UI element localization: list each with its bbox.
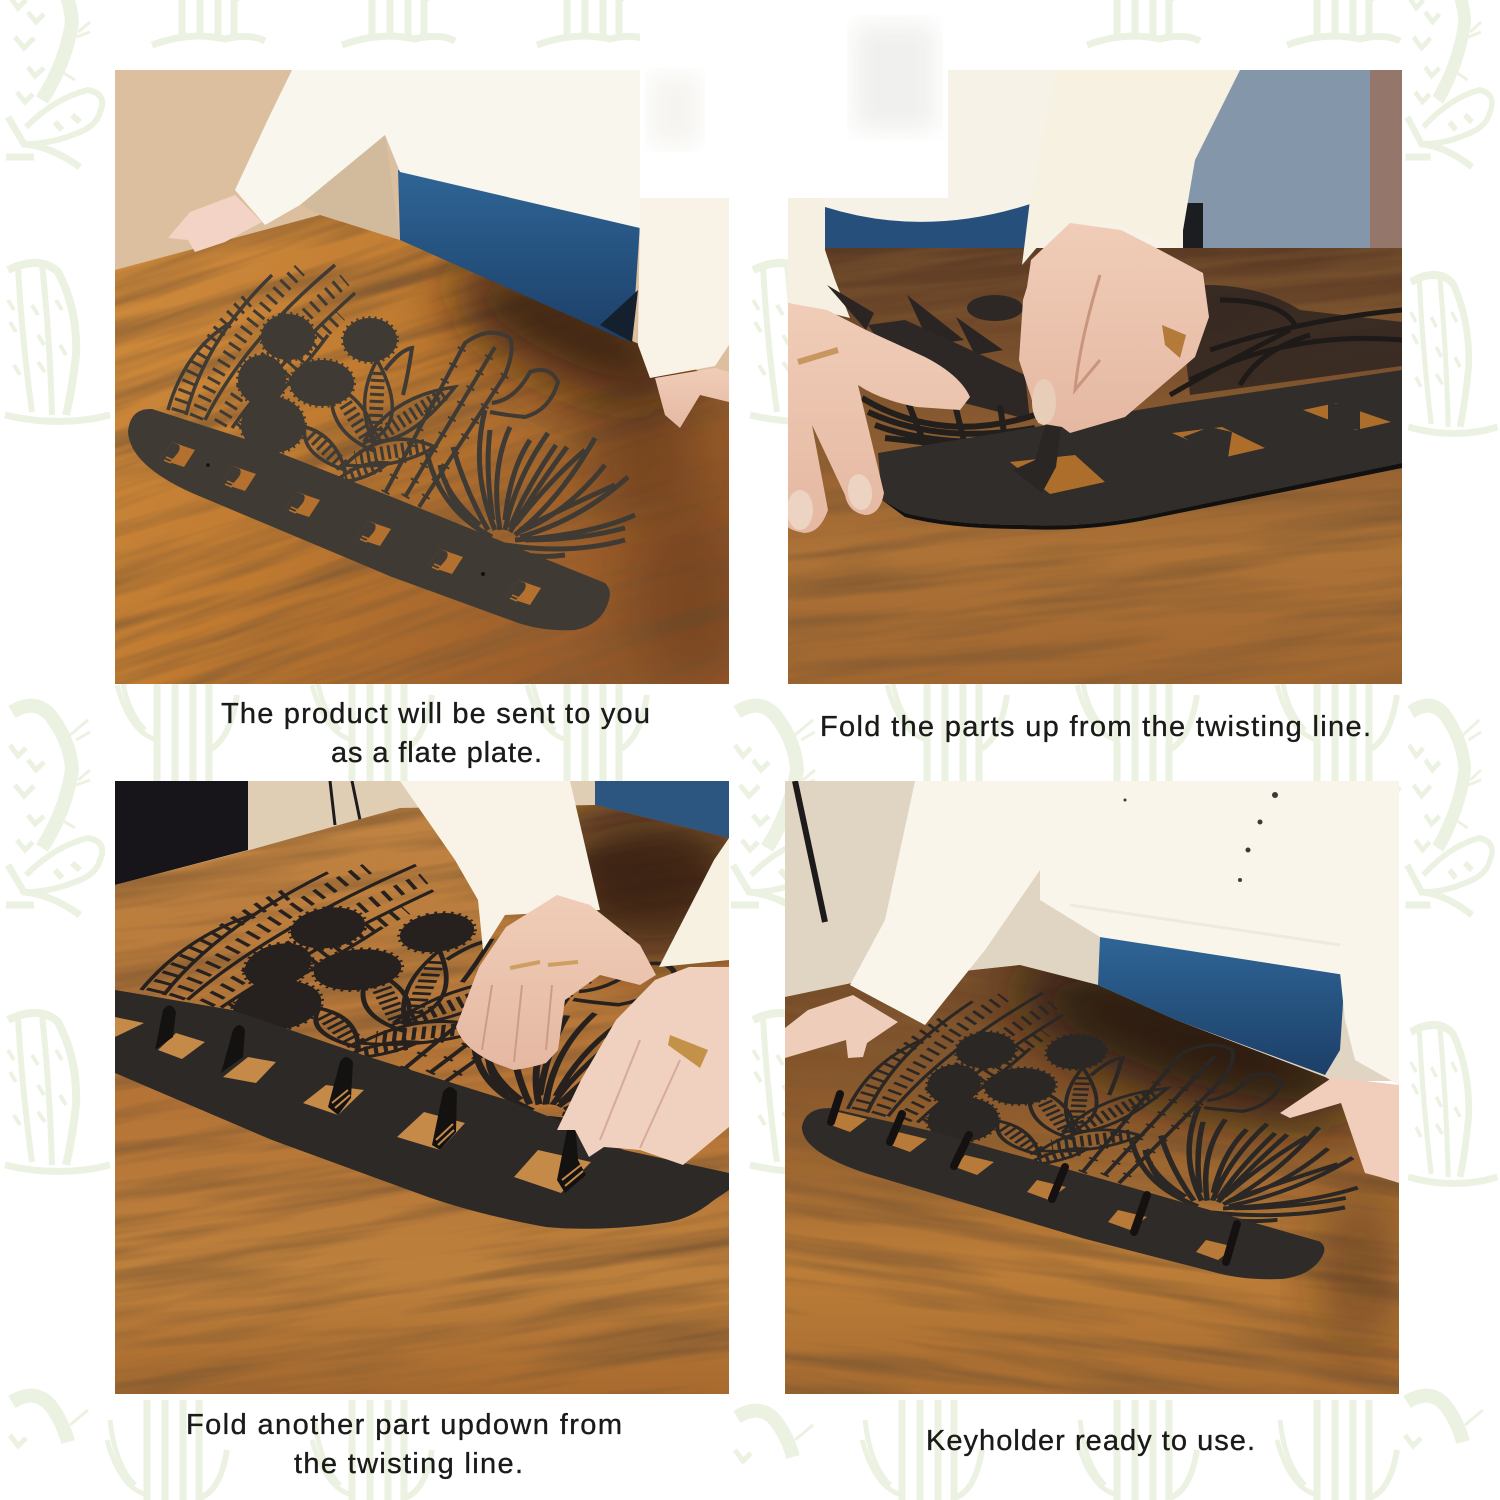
hand back	[456, 895, 656, 1070]
caption: step 1	[221, 698, 650, 769]
cactus cutout artwork	[837, 990, 1375, 1224]
sleeve left	[788, 248, 850, 318]
caption: step 3: the twisting line.	[294, 1448, 523, 1480]
jeans	[825, 204, 1030, 248]
sweater sleeve right	[1022, 70, 1240, 265]
hand front	[557, 967, 729, 1165]
plate	[115, 990, 729, 1229]
wood table	[785, 965, 1399, 1394]
folded tabs	[155, 1005, 586, 1193]
sweater ribbing	[1070, 905, 1340, 945]
left hand	[168, 195, 262, 252]
caption: step 2: Fold the parts up from the twisting line.	[820, 711, 1371, 743]
fold windows	[828, 1112, 1235, 1260]
fold windows	[115, 1017, 591, 1193]
right hand	[655, 368, 729, 428]
right hand	[1280, 1077, 1399, 1183]
cactus artwork right	[1170, 285, 1402, 395]
caption: step 3	[186, 1409, 622, 1480]
white sweater	[235, 70, 640, 228]
jeans	[398, 170, 640, 342]
caption: step 3: Fold another part updown from	[186, 1409, 622, 1441]
left hand	[785, 995, 898, 1058]
caption: step 4: Keyholder ready to use.	[926, 1425, 1255, 1457]
sweater knit holes	[1124, 792, 1278, 882]
panel: step 4 finished keyholder	[785, 781, 1399, 1394]
fold windows	[160, 442, 541, 605]
panel: step 3 fold other parts	[115, 781, 729, 1394]
folded tabs	[831, 1094, 1237, 1262]
jeans	[1098, 937, 1345, 1075]
tab stripes	[332, 1090, 583, 1186]
caption: step 1: as a flate plate.	[331, 737, 542, 769]
cactus cutout artwork	[139, 864, 677, 1122]
stand leg	[795, 781, 825, 922]
white overlay patch	[640, 15, 948, 198]
plate	[878, 370, 1402, 526]
left hand	[787, 303, 970, 533]
cactus artwork left	[827, 285, 1035, 445]
right hand pinching	[1019, 223, 1209, 433]
panel: step 2 fold parts	[788, 70, 1402, 684]
cactus cutout artwork	[168, 265, 635, 556]
sleeves	[400, 781, 600, 950]
wood table	[788, 248, 1402, 684]
wood table	[115, 805, 729, 1394]
panel: step 1 flat plate	[115, 70, 729, 684]
flat plate	[128, 409, 610, 630]
fold windows	[1010, 403, 1391, 494]
caption: step 1: The product will be sent to you	[221, 698, 650, 730]
sweater	[850, 781, 1399, 1085]
plate	[788, 1104, 1337, 1283]
folded tab	[1018, 424, 1058, 490]
wood table	[115, 215, 729, 684]
